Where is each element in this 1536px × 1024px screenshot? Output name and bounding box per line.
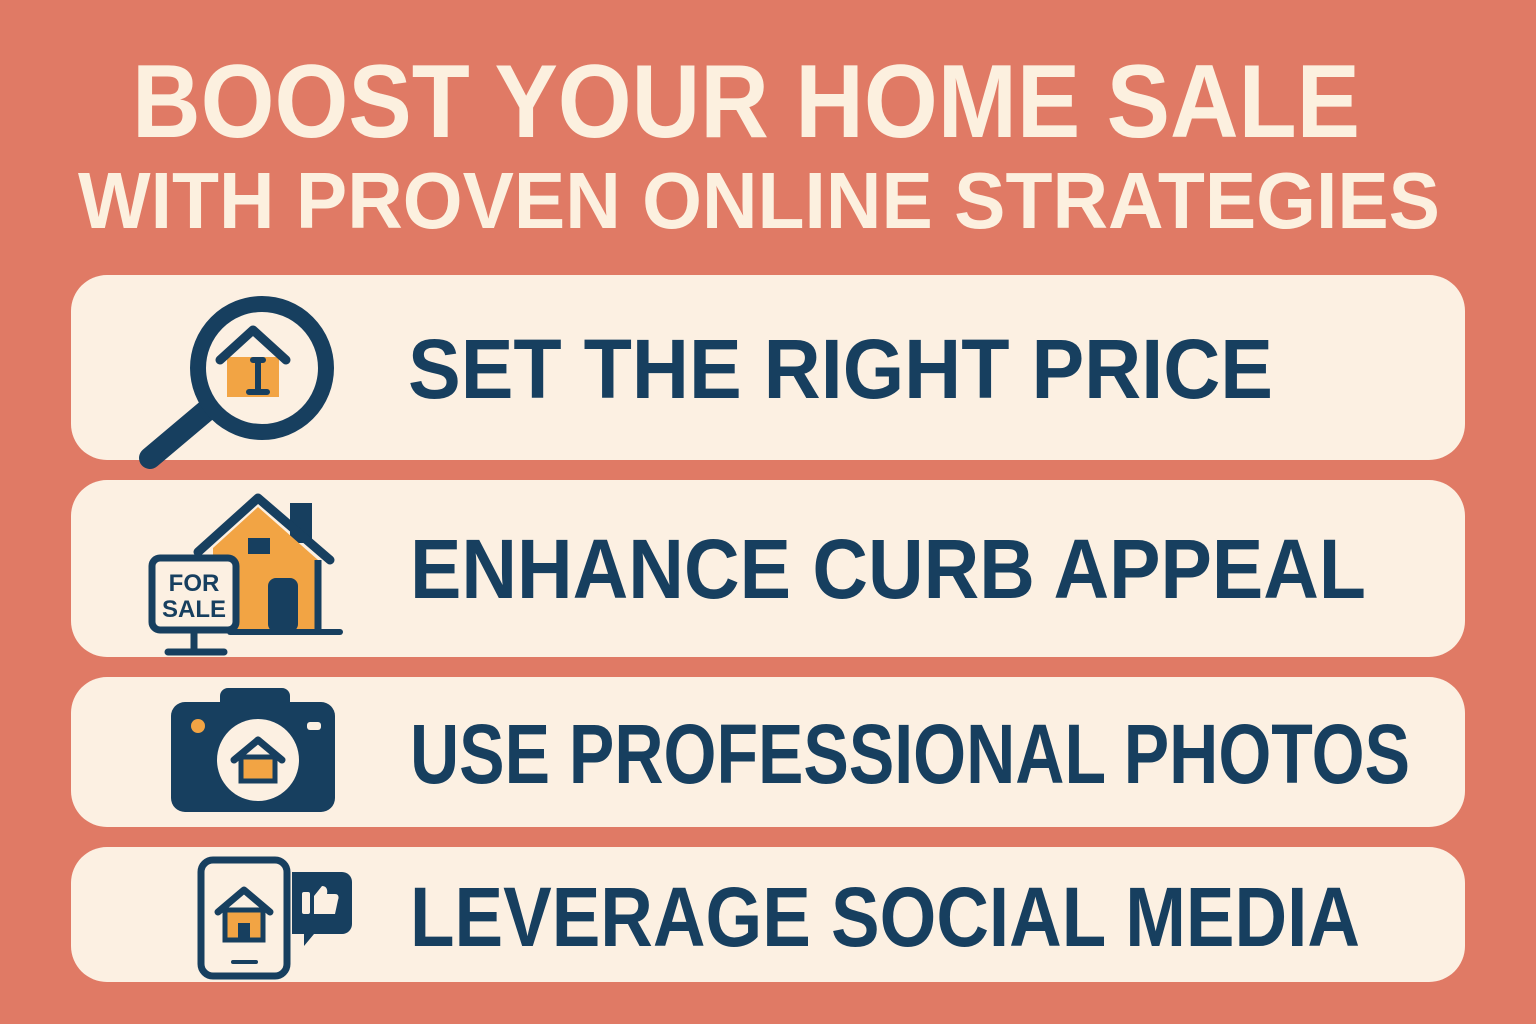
- icon: house for sale: [152, 498, 340, 652]
- panel: enhance curb appeal: [71, 480, 1465, 657]
- panel: use professional photos: [71, 677, 1465, 827]
- title: [78, 44, 1440, 245]
- icon: house for sale: FOR: [169, 570, 219, 597]
- icon: phone with like bubble: [201, 860, 352, 976]
- title: BOOST YOUR HOME SALE: [132, 44, 1360, 160]
- icon: magnifier house: [150, 304, 326, 458]
- icon: camera: [171, 688, 335, 812]
- heading: leverage social media: LEVERAGE SOCIAL MEDIA: [410, 870, 1360, 964]
- panel: set the right price: [71, 275, 1465, 460]
- heading: set the right price: SET THE RIGHT PRICE: [408, 322, 1273, 416]
- icon: house for sale: SALE: [162, 596, 226, 623]
- panel: leverage social media: [71, 847, 1465, 982]
- heading: enhance curb appeal: ENHANCE CURB APPEAL: [410, 522, 1366, 616]
- title: WITH PROVEN ONLINE STRATEGIES: [78, 156, 1440, 245]
